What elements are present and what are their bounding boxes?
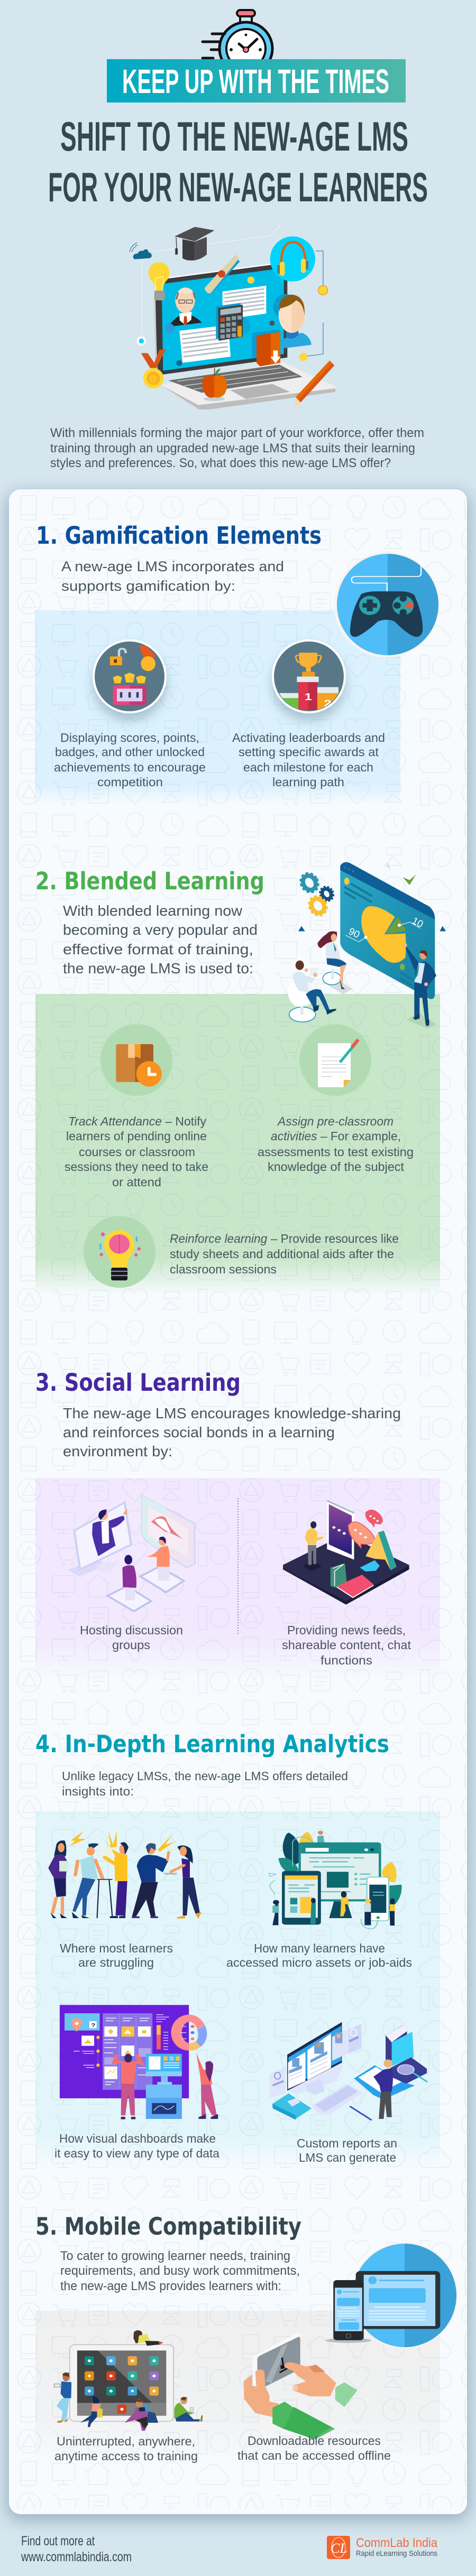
section 3 intro: [63, 1405, 401, 1459]
section 3: social learning: [35, 1369, 411, 1667]
illustration: visual dashboards: [60, 2005, 218, 2119]
section 3 intro: The new-age LMS encourages knowledge-sharing: [63, 1405, 401, 1421]
caption: dashboards: it easy to view any type of data: [54, 2146, 219, 2160]
footer: CommLab India logo: [327, 2536, 438, 2559]
section 4 intro: insights into:: [62, 1784, 134, 1798]
caption: pre-classroom activities: Assign pre-classroom: [277, 1114, 393, 1128]
caption: dashboards: How visual dashboards make: [59, 2132, 216, 2145]
section 2 intro: [63, 903, 258, 977]
caption: track attendance: Track Attendance – Notify: [68, 1114, 206, 1128]
caption: news feeds: shareable content, chat: [282, 1638, 411, 1652]
caption: custom reports: Custom reports an: [297, 2136, 397, 2150]
illustration: hands holding tablet with download: [244, 2332, 358, 2440]
title: [48, 113, 428, 210]
card shadow: [7, 492, 469, 2521]
caption: reinforce learning: [170, 1232, 399, 1276]
caption: anywhere access: Uninterrupted, anywhere,: [57, 2434, 195, 2448]
illustration: team reviewing pie chart board: 10: [410, 915, 425, 929]
caption: downloadable resources: [237, 2434, 391, 2462]
icon: unlocked achievements: [94, 640, 166, 712]
illustration: news feeds and chat platform: [283, 1501, 409, 1605]
caption: anywhere access: anytime access to training: [54, 2449, 198, 2463]
intro text: [50, 426, 424, 470]
icon: game controller: [334, 552, 440, 657]
figure: standing presenter: [403, 943, 436, 1029]
illustration: devices with micro assets: [269, 1831, 401, 1929]
caption: discussion groups: [80, 1623, 183, 1652]
footer: find out more: Find out more at: [21, 2534, 95, 2549]
section 4 intro: [62, 1769, 348, 1798]
intro text: training through an upgraded new-age LMS that suits their learning: [50, 441, 415, 455]
intro text: With millennials forming the major part of your workforce, offer them: [50, 426, 424, 440]
caption: track attendance: courses or classroom: [79, 1145, 195, 1159]
section 2 intro: the new-age LMS is used to:: [63, 960, 253, 977]
footer: CommLab India logo: CommLab India: [356, 2536, 438, 2550]
section 4: analytics: [35, 1730, 427, 2164]
section 5 intro: requirements, and busy work commitments,: [60, 2264, 300, 2278]
caption: leaderboards: Activating leaderboards and: [232, 731, 385, 745]
caption: downloadable resources: that can be accessed offline: [237, 2449, 391, 2462]
caption: pre-classroom activities: assessments to test existing: [258, 1145, 414, 1159]
caption: pre-classroom activities: activities – For example,: [271, 1129, 401, 1143]
divider: [237, 1498, 239, 1634]
illustration: struggling learners: [48, 1831, 202, 1919]
heading 3: 3. Social Learning: [35, 1369, 241, 1397]
caption: reinforce learning: classroom sessions: [170, 1262, 277, 1276]
footer: CommLab India logo: Rapid eLearning Solutions: [356, 2549, 437, 2558]
icon: document and pen: [299, 1024, 371, 1096]
section 5 intro: [60, 2249, 300, 2293]
caption: news feeds: [282, 1623, 411, 1667]
caption: track attendance: sessions they need to take: [65, 1160, 208, 1174]
section 2 intro: With blended learning now: [63, 903, 243, 919]
footer: find out more: www.commlabindia.com: [21, 2550, 132, 2564]
illustration: online discussion group: [67, 1495, 195, 1611]
footer: find out more: [21, 2534, 132, 2564]
section 2 intro: effective format of training,: [63, 941, 253, 957]
caption: custom reports: [297, 2136, 397, 2164]
caption: reinforce learning: Reinforce learning – Provide resources like: [170, 1232, 399, 1245]
caption: leaderboards: each milestone for each: [243, 760, 373, 774]
illustration: team reviewing pie chart board: [288, 862, 446, 1029]
icon: podium and trophy: 2: [324, 698, 332, 709]
section 4 intro: Unlike legacy LMSs, the new-age LMS offers detailed: [62, 1769, 348, 1783]
heading 2: 2. Blended Learning: [35, 867, 264, 895]
caption: micro assets: [226, 1941, 412, 1969]
caption: reinforce learning: study sheets and additional aids after the: [170, 1247, 394, 1261]
caption: news feeds: Providing news feeds,: [287, 1623, 406, 1637]
caption: scores and badges: Displaying scores, points,: [60, 731, 199, 745]
caption: anywhere access: [54, 2434, 198, 2463]
section 3 intro: environment by:: [63, 1443, 172, 1459]
intro text: styles and preferences. So, what does this new-age LMS offer?: [50, 456, 391, 470]
caption: downloadable resources: Downloadable resources: [248, 2434, 381, 2448]
caption: struggling: Where most learners: [60, 1941, 173, 1955]
faint icon pattern: [9, 495, 467, 2509]
section 5 intro: the new-age LMS provides learners with:: [60, 2279, 281, 2293]
hero illustration: laptop with learning icons: [130, 224, 336, 410]
caption: struggling: are struggling: [78, 1956, 154, 1969]
section 2: blended learning: [35, 862, 446, 1288]
panel: social learning background: [35, 1478, 440, 1680]
section 3 intro: and reinforces social bonds in a learning: [63, 1424, 335, 1440]
caption: discussion groups: groups: [112, 1638, 150, 1652]
icon: podium and trophy: 1: [305, 692, 312, 702]
caption: dashboards: [54, 2132, 219, 2160]
panel: blended learning background: [35, 994, 440, 1295]
panel: mobile compatibility background: [35, 2311, 440, 2464]
section 1 intro: A new-age LMS incorporates and: [61, 559, 284, 574]
section 1 intro: supports gamification by:: [61, 578, 235, 594]
banner: keep up with the times: [107, 59, 406, 103]
icon: podium and trophy: [273, 640, 345, 712]
section 5: mobile compatibility: [35, 2212, 458, 2463]
illustration: visual dashboards: ?: [91, 2022, 95, 2028]
caption: discussion groups: Hosting discussion: [80, 1623, 183, 1637]
caption: scores and badges: competition: [97, 775, 163, 789]
icon: stopwatch: [201, 9, 274, 59]
caption: custom reports: LMS can generate: [299, 2151, 396, 2164]
caption: leaderboards: [232, 731, 385, 789]
icon: package with clock: [100, 1024, 172, 1096]
heading 5: 5. Mobile Compatibility: [35, 2212, 301, 2240]
footer: CommLab India logo: CL: [331, 2541, 347, 2556]
caption: pre-classroom activities: [258, 1114, 414, 1174]
illustration: custom reports: [270, 2022, 427, 2120]
main white card: [9, 489, 467, 2514]
heading 1: 1. Gamification Elements: [36, 522, 322, 550]
caption: track attendance: learners of pending online: [66, 1129, 207, 1143]
caption: micro assets: How many learners have: [254, 1941, 385, 1955]
section 2 intro: becoming a very popular and: [63, 922, 258, 938]
caption: track attendance: or attend: [112, 1175, 161, 1189]
caption: news feeds: functions: [321, 1653, 372, 1667]
caption: struggling: [60, 1941, 173, 1969]
hero illustration: laptop with learning icons: @: [149, 374, 158, 384]
icon: phone and tablet: [326, 2242, 458, 2349]
caption: micro assets: accessed micro assets or job-aids: [226, 1956, 412, 1969]
icon: lightbulb with brain: [84, 1216, 155, 1288]
heading 4: 4. In-Depth Learning Analytics: [35, 1730, 389, 1758]
caption: scores and badges: [54, 731, 206, 789]
caption: leaderboards: learning path: [272, 775, 344, 789]
figure: seated man with tablet: [288, 961, 336, 1022]
caption: scores and badges: achievements to encourage: [54, 760, 206, 774]
panel: gamification background: [35, 610, 400, 804]
figure: seated woman: [318, 931, 353, 994]
caption: leaderboards: setting specific awards at: [239, 745, 379, 759]
caption: scores and badges: badges, and other unlocked: [55, 745, 205, 759]
section 1: gamification: [36, 522, 440, 789]
caption: track attendance: [65, 1114, 208, 1189]
caption: pre-classroom activities: knowledge of the subject: [268, 1160, 405, 1174]
illustration: team reviewing pie chart board: 90: [347, 925, 362, 940]
section 5 intro: To cater to growing learner needs, training: [60, 2249, 290, 2263]
section 1 intro: [61, 559, 284, 594]
illustration: people around a large tablet: [54, 2330, 203, 2431]
panel: analytics background: [35, 1811, 440, 2170]
